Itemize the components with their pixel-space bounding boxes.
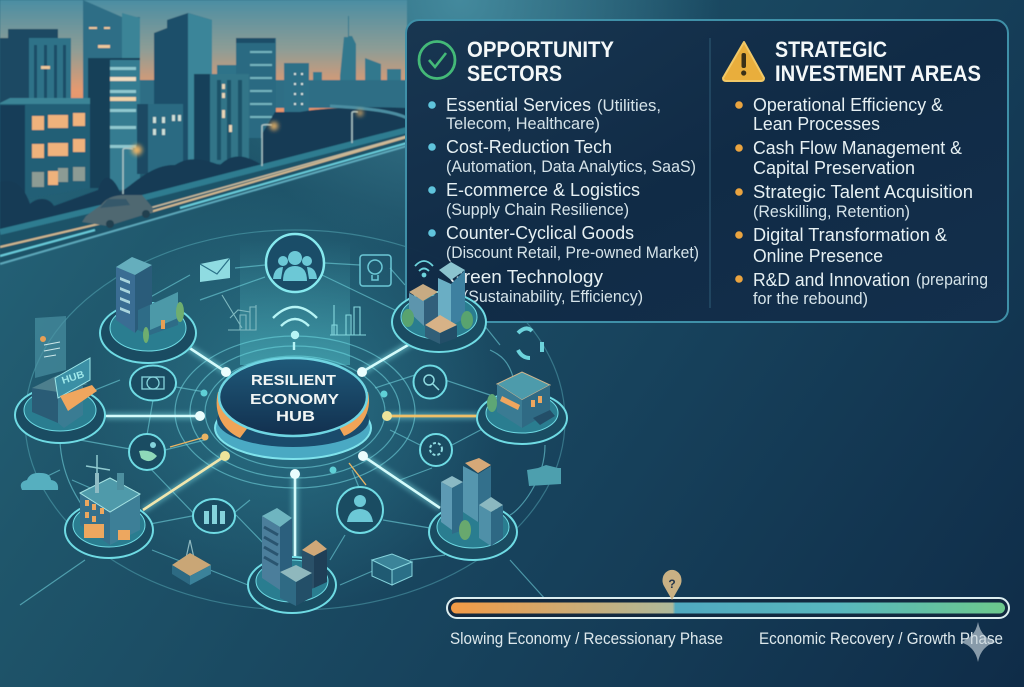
icon: gear circle: [420, 434, 452, 466]
network lines: [20, 230, 565, 610]
timeline labels: [450, 629, 1003, 648]
list: strategic investment areas: Lean Processes: [753, 113, 880, 134]
node: hub store left: HUB: [61, 369, 86, 387]
hub label: HUB: [276, 408, 315, 425]
list: opportunity sectors: Counter-Cyclical Goods: [446, 222, 634, 243]
node: hub store left: [15, 316, 105, 443]
chart: faint line: [222, 295, 256, 330]
node: factory bottom-left: [65, 455, 153, 558]
icon: truck: [527, 465, 561, 486]
list: opportunity sectors: Telecom, Healthcare): [446, 115, 600, 133]
list: strategic investment areas: Online Presence: [753, 245, 883, 266]
list: strategic investment areas: Capital Preservation: [753, 157, 915, 178]
node: towers bottom-center: [248, 508, 336, 613]
node: towers bottom-right: [429, 458, 517, 560]
list: opportunity sectors: Cost-Reduction Tech: [446, 136, 612, 157]
list: opportunity sectors: (Supply Chain Resilience): [446, 201, 629, 219]
timeline labels: Slowing Economy / Recessionary Phase: [450, 629, 723, 648]
icon: small wifi: [415, 261, 433, 276]
dark hills: [0, 107, 407, 232]
mid office with lit windows: [137, 104, 183, 174]
list: strategic investment areas: R&D and Innovation: [753, 269, 910, 290]
list: strategic investment areas: (preparing: [916, 271, 988, 289]
heading: opportunity sectors: SECTORS: [467, 61, 562, 86]
icon: warning triangle: [723, 42, 764, 81]
icon: box: [372, 554, 412, 585]
node: store right: [477, 372, 567, 444]
road: [0, 130, 407, 265]
node: office top-left: [100, 257, 196, 363]
heading: opportunity sectors: OPPORTUNITY: [467, 37, 614, 62]
glowing connectors: [105, 338, 478, 565]
icon: magnifier circle: [414, 366, 446, 398]
icon: sparkle: [960, 622, 996, 662]
icon: cloud: [21, 473, 58, 490]
list: strategic investment areas: (Reskilling, Retention): [753, 203, 910, 221]
marker: question pin: ?: [668, 577, 676, 591]
list: strategic investment areas: [735, 94, 988, 308]
tall towers: [83, 0, 140, 100]
heading: strategic investment areas: STRATEGIC: [775, 37, 887, 62]
icon: people circle: [266, 234, 324, 292]
icon: small tower: [172, 540, 211, 585]
icon: mail: [200, 258, 230, 282]
list: strategic investment areas: Strategic Talent Acquisition: [753, 181, 973, 202]
icon: bulb: [360, 255, 391, 286]
hub label: ECONOMY: [250, 391, 339, 408]
sky: [0, 0, 407, 112]
list: strategic investment areas: Digital Transformation &: [753, 224, 948, 245]
heading: opportunity sectors: [467, 37, 614, 86]
hub label: RESILIENT: [251, 372, 336, 389]
heading: strategic investment areas: INVESTMENT AREAS: [775, 61, 981, 86]
list: opportunity sectors: Green Technology: [449, 266, 604, 287]
list: opportunity sectors: E-commerce & Logistics: [446, 179, 640, 200]
list: opportunity sectors: (Automation, Data Analytics, SaaS): [446, 158, 696, 176]
list: opportunity sectors: [428, 94, 699, 306]
city skyline with road: [0, 0, 407, 265]
icon: leaf circle: [129, 434, 165, 470]
list: strategic investment areas: Cash Flow Management &: [753, 137, 963, 158]
list: opportunity sectors: (Discount Retail, Pre-owned Market): [446, 244, 699, 262]
central hub: resilient economy hub: [215, 358, 371, 459]
icon: gear outline: [518, 328, 542, 358]
icon: bars circle: [193, 499, 235, 533]
icon: person circle: [337, 487, 383, 533]
icon: green check: [419, 42, 455, 78]
node: towers top-right: [392, 262, 486, 352]
hub label: [250, 372, 339, 425]
list: opportunity sectors: (Utilities,: [597, 97, 661, 115]
icon: target circle: [130, 366, 176, 400]
light beam above hub: [240, 240, 350, 365]
chart: faint bars: [330, 305, 366, 335]
street lamps: [123, 112, 358, 194]
list: opportunity sectors: Essential Services: [446, 94, 591, 115]
icon: car: [82, 195, 153, 228]
panel: opportunity and investment: [406, 20, 1008, 322]
timeline bar: [447, 598, 1009, 618]
list: strategic investment areas: Operational Efficiency &: [753, 94, 944, 115]
list: opportunity sectors: (Sustainability, Efficiency): [463, 288, 643, 306]
icon: wifi: [273, 307, 317, 350]
marker: question pin: [662, 570, 682, 600]
distant buildings: [140, 16, 407, 108]
timeline labels: Economic Recovery / Growth Phase: [759, 629, 1003, 648]
list: strategic investment areas: for the rebound): [753, 290, 868, 308]
heading: strategic investment areas: [775, 37, 981, 86]
